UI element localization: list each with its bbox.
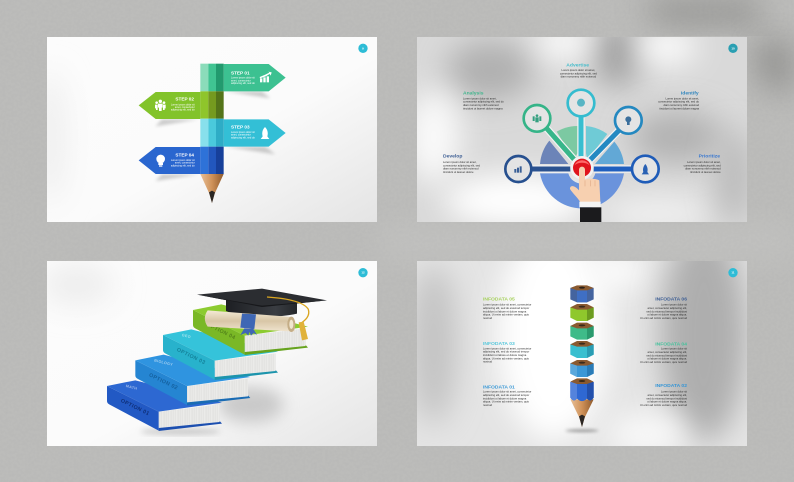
book: option 01 [107,380,222,431]
text block: infodata 05: Lorem ipsum dolor sit amet, consectetur [483,303,531,307]
icon: people [155,100,166,111]
text block: infodata 05 [483,297,531,320]
label: advertise: diam nonummy nibh euismod [561,75,597,79]
book: option 03 [163,329,278,380]
text block: infodata 02: Ut enim ad minim veniam, quis nostrud [640,403,687,407]
text block: infodata 05: adipiscing elit, sed do eiusmod tempor [483,306,529,310]
icon: head [577,99,585,107]
label: advertise [560,63,597,79]
label: prioritize: diam nonummy nibh euismod [685,167,721,171]
icon: rocket [642,164,649,174]
text block: infodata 03: aliqua. Ut enim ad minim veniam, quis [483,356,530,360]
panel: step signpost pencil [37,37,377,222]
text block: infodata 06: Lorem ipsum dolor sit [661,303,687,307]
label: prioritize: Prioritize [699,153,720,159]
text block: infodata 06: ut labore et dolore magna aliqua. [647,313,687,317]
panel: book staircase with graduation cap [40,261,377,446]
text block: infodata 05: incididunt ut labore et dolore magna [483,309,527,313]
book: option 02: OPTION 02 [148,372,179,392]
page number badge: 9 [362,46,364,50]
ring: prioritize [632,156,659,182]
label: analysis: diam nonummy nibh euismod [463,103,499,107]
text block: infodata 03: adipiscing elit, sed do eiusmod tempor [483,350,529,354]
book: option 02: BIOLOGY [154,358,174,367]
fan sectors [540,126,624,208]
text block: infodata 05: INFODATA 05 [483,297,515,303]
diploma scroll [205,310,295,336]
segment: pencil tip [570,378,594,427]
ring: develop [505,156,531,182]
label: prioritize: consectetur adipiscing elit, sed [684,163,721,167]
text block: infodata 02: ut labore et dolore magna aliqua. [647,400,687,404]
label: prioritize [684,153,721,174]
label: identify: tincidunt ut laoreet dolore magna [659,106,699,110]
book: option 01: OPTION 01 [119,398,150,417]
label: develop: Lorem ipsum dolor sit amet, [443,160,477,164]
icon: rocket [261,127,269,139]
book: option 04 [193,304,308,355]
icon: rising bar chart [260,72,272,82]
hand with sleeve [570,167,601,222]
text block: infodata 03: nostrud [483,360,493,364]
text block: infodata 04: Lorem ipsum dolor sit [661,347,687,351]
text block: infodata 04: INFODATA 04 [655,341,687,347]
segment: sky blue [570,360,594,377]
arrow: step 04 [139,147,200,174]
arrow: step 04: STEP 04 [175,152,194,157]
text block: infodata 06: INFODATA 06 [655,297,687,303]
label: advertise: consectetur adipiscing elit, sed [560,71,597,75]
text block: infodata 03: incididunt ut labore et dolore magna [483,353,527,357]
text block: infodata 06: Ut enim ad minim veniam, quis nostrud [640,316,687,320]
label: analysis [463,91,504,110]
panel: stacked pencil segments [417,261,747,446]
text block: infodata 02: amet, consectetur adipiscing elit, [648,393,687,397]
arrow: step 01 [224,64,286,91]
label: analysis: Lorem ipsum dolor sit amet, [463,96,497,100]
label: identify: diam nonummy nibh euismod [663,103,699,107]
text block: infodata 02: Lorem ipsum dolor sit [661,390,687,394]
text block: infodata 05: aliqua. Ut enim ad minim veniam, quis [483,313,530,317]
arrow: step 02: STEP 02 [175,97,194,102]
label: develop: diam nonummy nibh euismod [443,167,479,171]
label: identify [658,91,699,110]
panel: hand pressing button fan [417,37,747,222]
book: option 03: GEO [181,333,191,339]
label: identify: Identify [681,91,699,97]
page number badge: 11 [731,271,735,275]
diploma ribbon [240,314,257,336]
segment: navy [570,285,594,302]
icon: bulb [625,116,631,125]
graduation cap [197,289,327,340]
ring: identify [615,107,642,134]
pencil body [200,64,224,203]
segment: green [570,323,594,340]
page number badge [358,44,368,53]
page number badge: 12 [361,271,365,275]
label: advertise: Advertise [566,63,589,69]
arrow: step 01: Lorem ipsum dolor sit [231,77,255,80]
label: analysis: consectetur adipiscing elit, sed do [463,100,504,104]
pencil tip [200,174,224,203]
label: develop: consectetur adipiscing elit, sed [443,163,481,167]
text block: infodata 01 [483,384,531,407]
arrow: step 02: adipiscing elit, sed do [171,109,195,112]
text block: infodata 06: amet, consectetur adipiscing elit, [648,306,687,310]
text block: infodata 06 [640,297,687,320]
text block: infodata 02: INFODATA 02 [655,383,687,389]
label: identify: Lorem ipsum dolor sit amet, [665,96,699,100]
icon: chart [514,166,522,173]
segment: teal [570,341,594,358]
arrow: step 03: STEP 03 [231,124,250,129]
text block: infodata 01: aliqua. Ut enim ad minim veniam, quis [483,400,530,404]
text block: infodata 04: ut labore et dolore magna aliqua. [647,357,687,361]
ring: analysis [524,105,550,132]
arrow: step 04: amet, consectetur [175,162,195,165]
icon: light bulb [156,155,165,167]
page number badge [728,44,738,53]
text block: infodata 02 [640,383,687,407]
page number badge: 10 [731,46,735,50]
connector bars [532,117,632,169]
text block: infodata 01: Lorem ipsum dolor sit amet, consectetur [483,390,531,394]
text block: infodata 03: Lorem ipsum dolor sit amet, consectetur [483,346,531,350]
text block: infodata 04: amet, consectetur adipiscing elit, [648,350,687,354]
page number badge [728,268,738,277]
arrow: step 04: Lorem ipsum dolor sit [171,159,195,162]
arrow: step 01: amet, consectetur [231,79,251,82]
icon: people [533,114,541,122]
text block: infodata 06: sed do eiusmod tempor incididunt [646,309,687,313]
label: prioritize: tincidunt ut laoreet dolore [690,170,721,174]
book: option 01: MATH [125,384,138,391]
red button [570,156,594,179]
text block: infodata 01: INFODATA 01 [483,384,515,390]
text block: infodata 04: Ut enim ad minim veniam, quis nostrud [640,360,687,364]
label: develop: tincidunt ut laoreet dolore [443,170,474,174]
pencil shadow [565,429,599,432]
book: option 02 [135,355,250,405]
segment: lime [570,304,594,321]
arrow: step 03 [224,119,286,147]
page number badge [358,268,368,277]
label: develop [443,153,481,174]
arrow: step 04: adipiscing elit, sed do [171,164,195,167]
label: analysis: Analysis [463,91,484,97]
ring: advertise [568,90,594,116]
label: develop: Develop [443,153,462,159]
text block: infodata 03: INFODATA 03 [483,341,515,347]
book: option 04: OPTION 04 [205,322,236,341]
arrow: step 02 [139,92,200,119]
label: analysis: tincidunt ut laoreet dolore magna [463,106,503,110]
text block: infodata 01: adipiscing elit, sed do eiusmod tempor [483,393,529,397]
arrow: step 02: Lorem ipsum dolor sit [171,103,195,106]
text block: infodata 01: incididunt ut labore et dolore magna [483,396,527,400]
arrow: step 01: STEP 01 [231,70,250,75]
arrow: step 02: amet, consectetur [175,106,195,109]
arrow: step 03: adipiscing elit, sed do [231,136,255,139]
book: option 03: OPTION 03 [175,347,206,366]
text block: infodata 01: nostrud [483,403,493,407]
text block: infodata 03 [483,341,531,364]
arrow: step 03: Lorem ipsum dolor sit [231,131,255,134]
label: identify: consectetur adipiscing elit, sed do [658,100,699,104]
arrow: step 03: amet, consectetur [231,134,251,137]
arrow: step 01: adipiscing elit, sed do [231,82,255,85]
label: prioritize: Lorem ipsum dolor sit amet, [687,160,721,164]
text block: infodata 05: nostrud [483,316,493,320]
arrow shadows [155,91,275,181]
text block: infodata 04: sed do eiusmod tempor incididunt [646,353,687,357]
text block: infodata 02: sed do eiusmod tempor incididunt [646,396,687,400]
text block: infodata 04 [640,341,687,364]
label: advertise: Lorem ipsum dolor sit amet, [562,68,595,72]
